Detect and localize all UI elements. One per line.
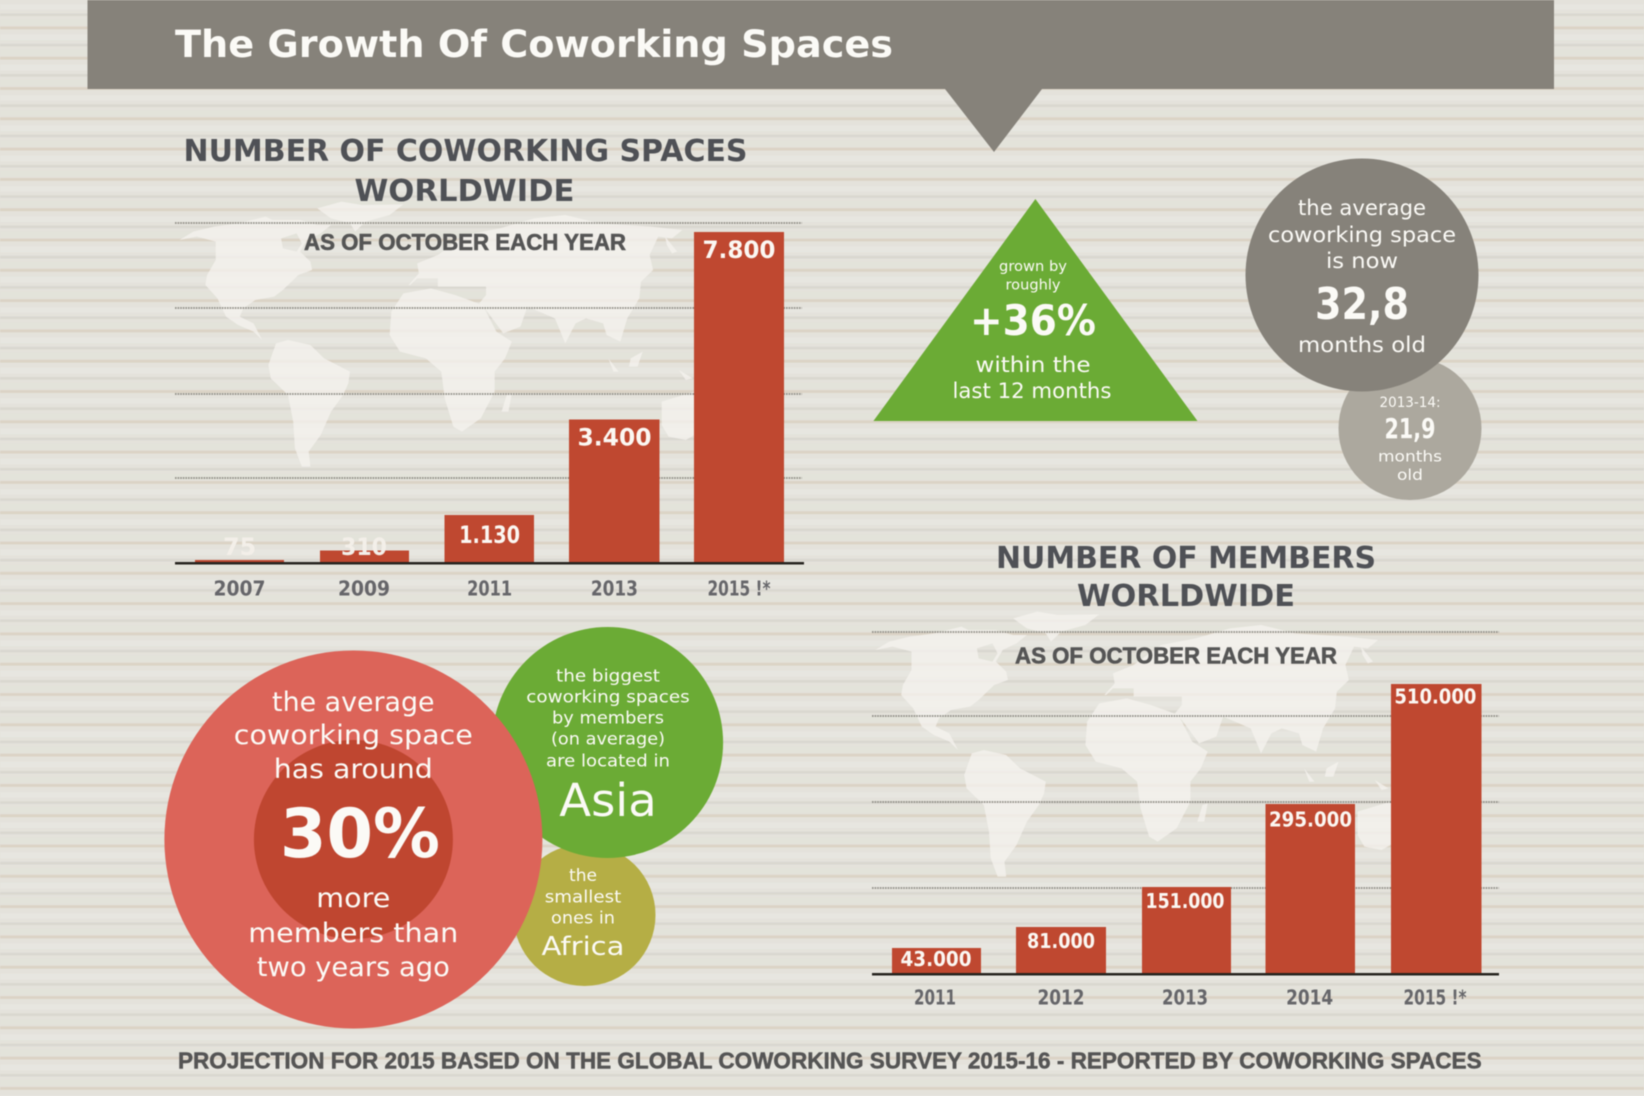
callout: growth triangle: last 12 months <box>952 379 1112 403</box>
callout: biggest in Asia circle: by members <box>552 708 664 728</box>
header banner <box>88 0 1554 152</box>
callout: small age circle 2013-14: months <box>1378 448 1442 466</box>
bar values: 81.000 <box>1027 929 1095 953</box>
bar values: 75 <box>223 533 256 561</box>
callout: smallest in Africa circle <box>514 844 656 986</box>
callout: small age circle 2013-14: 21,9 <box>1384 412 1436 445</box>
bars <box>892 684 1482 974</box>
year labels: 2014 <box>1286 986 1333 1010</box>
callout: 30% more members circle: members than <box>248 918 458 949</box>
bar values: 1.130 <box>459 521 520 549</box>
callout: growth triangle <box>873 199 1198 421</box>
axis line <box>175 562 804 564</box>
callout: smallest in Africa circle: smallest <box>545 888 622 908</box>
axis line <box>872 973 1499 976</box>
panel: number of members chart <box>872 541 1499 1010</box>
callout: 30% more members circle <box>164 650 542 1028</box>
bar values: 3.400 <box>578 424 652 452</box>
year labels: 2013 <box>591 576 638 600</box>
callout: 30% more members circle: two years ago <box>257 952 450 983</box>
year labels: 2013 <box>1162 986 1208 1010</box>
callout: small age circle 2013-14: 2013-14: <box>1380 395 1440 411</box>
callout: average age circle: the average <box>1298 196 1426 220</box>
callout: growth triangle: grown by <box>999 259 1067 275</box>
heading: coworking spaces: NUMBER OF COWORKING SPACES <box>184 134 748 169</box>
world map background <box>180 202 706 467</box>
year labels: 2015 !* <box>708 576 771 600</box>
callout: smallest in Africa circle: ones in <box>551 908 615 928</box>
callout: biggest in Asia circle: are located in <box>546 752 670 772</box>
callout: small age circle 2013-14 <box>1338 357 1482 500</box>
callout: smallest in Africa circle: the <box>569 866 597 886</box>
footnote: PROJECTION FOR 2015 BASED ON THE GLOBAL COWORKING SURVEY 2015-16 - REPORTED BY COWORKING SPACES <box>178 1048 1482 1074</box>
callout: 30% more members circle: more <box>316 883 390 914</box>
callout: biggest in Asia circle: (on average) <box>551 730 665 750</box>
bar values: 310 <box>341 533 387 561</box>
bar values: 295.000 <box>1269 808 1352 832</box>
callout: average age circle: is now <box>1326 249 1398 273</box>
subtitle: AS OF OCTOBER EACH YEAR <box>1015 642 1337 668</box>
callout: average age circle: months old <box>1298 333 1426 357</box>
callout: growth triangle: roughly <box>1006 278 1060 294</box>
bar values: 43.000 <box>900 947 972 971</box>
heading: members: WORLDWIDE <box>1077 579 1295 614</box>
subtitle: AS OF OCTOBER EACH YEAR <box>304 229 626 255</box>
heading: coworking spaces: WORLDWIDE <box>354 174 574 209</box>
callout: 30% more members circle: the average <box>272 687 435 718</box>
callout: biggest in Asia circle: coworking spaces <box>526 688 690 708</box>
year labels: 2011 <box>914 986 956 1010</box>
title: The Growth Of Coworking Spaces <box>175 23 893 66</box>
year labels <box>214 576 771 600</box>
callout: 30% more members circle: 30% <box>280 795 440 874</box>
heading: members: NUMBER OF MEMBERS <box>996 541 1376 576</box>
callout: small age circle 2013-14: old <box>1397 466 1423 484</box>
year labels: 2009 <box>338 576 390 600</box>
world map background <box>875 612 1402 877</box>
year labels: 2012 <box>1038 986 1084 1010</box>
callout: smallest in Africa circle: Africa <box>542 932 624 962</box>
bar values <box>900 684 1476 971</box>
year labels: 2007 <box>214 576 266 600</box>
callout: average age circle: coworking space <box>1268 223 1456 247</box>
year labels <box>914 986 1467 1010</box>
callout: growth triangle: within the <box>976 353 1090 377</box>
callout: biggest in Asia circle <box>492 627 723 858</box>
callout: 30% more members circle: coworking space <box>234 720 473 751</box>
callout: average age circle: 32,8 <box>1315 279 1409 330</box>
heading: members <box>996 541 1376 614</box>
year labels: 2011 <box>467 576 512 600</box>
callout: growth triangle: +36% <box>970 296 1096 345</box>
heading: coworking spaces <box>184 134 748 209</box>
bars <box>195 232 784 563</box>
year labels: 2015 !* <box>1404 986 1467 1010</box>
bar values: 151.000 <box>1146 889 1224 913</box>
callout: biggest in Asia circle: Asia <box>559 774 657 827</box>
bar values: 510.000 <box>1394 684 1476 708</box>
callout: average age circle <box>1246 158 1478 392</box>
panel: number of coworking spaces chart <box>175 134 804 600</box>
bar values: 7.800 <box>702 236 776 264</box>
bar values <box>223 236 776 561</box>
callout: 30% more members circle: has around <box>274 754 433 785</box>
callout: biggest in Asia circle: the biggest <box>556 666 660 686</box>
